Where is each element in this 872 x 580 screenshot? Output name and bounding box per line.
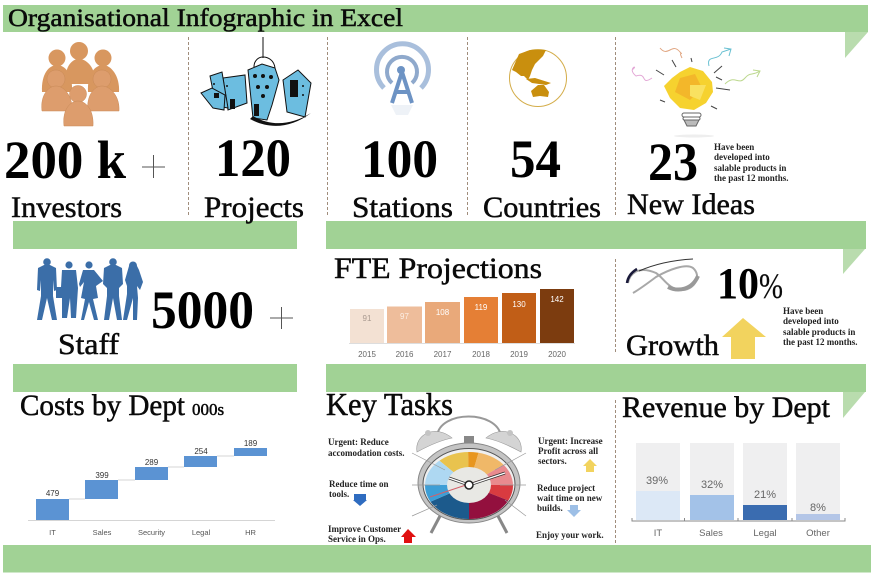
stat: 10% growth: Growth <box>626 329 719 362</box>
chart: revenue bars <box>632 443 845 539</box>
key tasks: left notes: Improve Customer <box>328 524 401 534</box>
illustration: alarm clock <box>412 416 526 534</box>
stat: 120 projects <box>204 128 304 224</box>
chart: FTE bar chart: 2015 <box>358 350 376 359</box>
key tasks: left notes: accomodation costs. <box>328 448 404 458</box>
chart: FTE bar chart: 119 <box>475 303 488 312</box>
icon: red up arrow <box>401 529 416 543</box>
chart: revenue bars: 21% <box>754 489 776 501</box>
band: row three left <box>13 364 297 392</box>
chart: costs waterfall: 189 <box>244 439 258 448</box>
new ideas note: salable products in <box>714 163 786 173</box>
heading: FTE projections: FTE Projections <box>334 252 542 285</box>
chart: revenue bars: 8% <box>810 502 826 514</box>
stat: 200 k investors: 200 k <box>4 130 126 190</box>
stat: 54 countries: Countries <box>483 191 601 224</box>
key tasks: right notes: Reduce project <box>537 483 595 493</box>
stat: 120 projects: Projects <box>204 191 304 224</box>
key tasks: right notes: sectors. <box>538 456 567 466</box>
key tasks: left notes <box>328 437 416 544</box>
stat: 120 projects: 120 <box>215 128 291 188</box>
chart: FTE bar chart: 2017 <box>434 350 452 359</box>
key tasks: right notes: builds. <box>537 503 563 513</box>
growth note: developed into <box>783 316 839 326</box>
key tasks: right notes <box>536 436 604 540</box>
key tasks: left notes: Service in Ops. <box>328 534 386 544</box>
key tasks: left notes: Reduce time on <box>329 479 388 489</box>
stat: 5000 staff: 5000 <box>151 280 254 340</box>
chart: costs waterfall: 399 <box>95 471 109 480</box>
key tasks: right notes: Urgent: Increase <box>538 436 603 446</box>
chart: FTE bar chart: 2016 <box>396 350 414 359</box>
heading: key tasks: Key Tasks <box>326 386 453 422</box>
chart: FTE bar chart: 2018 <box>472 350 490 359</box>
key tasks: left notes: Urgent: Reduce <box>328 437 389 447</box>
icon: staff silhouettes <box>37 258 143 320</box>
chart: revenue bars: Other <box>806 528 830 539</box>
stat: 200 k investors: Investors <box>11 191 122 224</box>
band: footer <box>3 545 871 572</box>
chart: costs waterfall: Legal <box>192 528 211 537</box>
chart: FTE bar chart: 130 <box>512 300 526 309</box>
icon: globe <box>510 50 566 106</box>
stat: 54 countries: 54 <box>510 129 561 189</box>
new ideas note: Have been <box>714 142 754 152</box>
growth note: Have been <box>783 306 823 316</box>
chart: revenue bars: Sales <box>699 528 723 539</box>
stat: 5000 staff: Staff <box>58 328 119 361</box>
icon: growth arrow <box>722 318 766 359</box>
banner: title ribbon <box>3 5 868 58</box>
icon: blue down arrow <box>353 494 367 506</box>
stat: 10% growth: % <box>759 266 783 306</box>
stat: 10% growth: 10 <box>717 259 759 308</box>
stat: 100 stations: 100 <box>361 129 438 189</box>
stat: 5000 staff <box>58 280 293 361</box>
chart: FTE bar chart <box>349 289 575 359</box>
icon: infinity ribbon <box>627 259 698 293</box>
growth note: the past 12 months. <box>783 337 858 347</box>
icon: radio tower <box>377 44 429 115</box>
key tasks: right notes: wait time on new <box>537 493 603 503</box>
new ideas note: the past 12 months. <box>714 173 789 183</box>
stat: 23 new ideas: New Ideas <box>627 188 755 221</box>
chart: FTE bar chart: 142 <box>550 295 564 304</box>
heading: revenue by dept: Revenue by Dept <box>622 391 831 424</box>
chart: costs waterfall <box>28 439 275 537</box>
stat: 10% growth <box>626 259 858 362</box>
stat: 100 stations: Stations <box>352 191 453 224</box>
chart: costs waterfall: IT <box>49 528 56 537</box>
heading: costs by dept: Costs by Dept000s <box>20 389 224 422</box>
icon: light blue down arrow <box>567 505 581 517</box>
chart: FTE bar chart: 97 <box>400 312 409 321</box>
new ideas note: developed into <box>714 152 770 162</box>
key tasks: right notes: Profit across all <box>538 446 599 456</box>
icon: yellow up arrow <box>583 459 597 472</box>
stat: 100 stations <box>352 129 453 224</box>
chart: FTE bar chart: 2019 <box>510 350 528 359</box>
chart: FTE bar chart: 2020 <box>548 350 566 359</box>
icon: city buildings <box>201 37 311 126</box>
chart: costs waterfall: 254 <box>194 447 208 456</box>
stat: 23 new ideas: 23 <box>648 132 698 192</box>
chart: revenue bars: 39% <box>646 475 668 487</box>
stat: 200 k investors <box>4 130 165 224</box>
stat: 54 countries <box>483 129 601 224</box>
icon: lightbulb with squiggles <box>632 48 760 138</box>
chart: costs waterfall: Sales <box>93 528 112 537</box>
chart: FTE bar chart: 108 <box>436 308 450 317</box>
chart: revenue bars: Legal <box>753 528 777 539</box>
key tasks: right notes: Enjoy your work. <box>536 530 604 540</box>
growth note: salable products in <box>783 327 855 337</box>
band: row two left <box>13 221 297 249</box>
chart: FTE bar chart: 91 <box>363 314 372 323</box>
chart: revenue bars: IT <box>654 528 662 539</box>
icon: investors group <box>42 42 119 126</box>
band: row three right <box>326 364 866 418</box>
chart: costs waterfall: HR <box>245 528 256 537</box>
chart: costs waterfall: 479 <box>46 489 60 498</box>
chart: costs waterfall: Security <box>138 528 165 537</box>
chart: costs waterfall: 289 <box>145 458 159 467</box>
stat: 23 new ideas <box>627 132 789 221</box>
chart: revenue bars: 32% <box>701 479 723 491</box>
key tasks: left notes: tools. <box>329 489 349 499</box>
title: Organisational Infographic in Excel <box>8 5 403 32</box>
band: row two right <box>326 221 866 274</box>
